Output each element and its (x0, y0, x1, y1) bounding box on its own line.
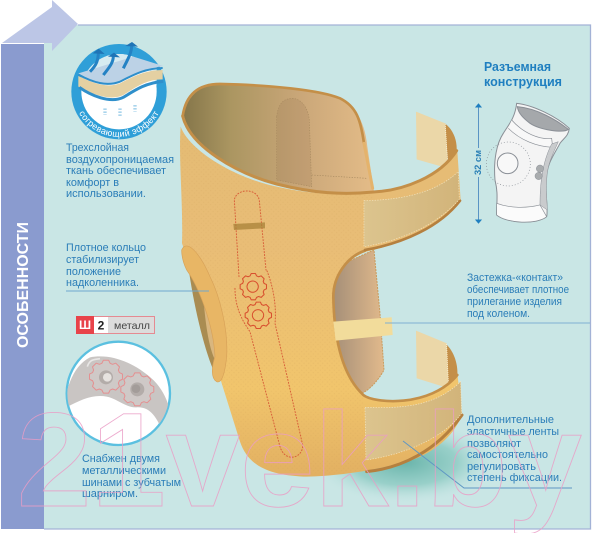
text: elastic straps: регулировать (467, 461, 536, 473)
splint buckle (233, 222, 265, 230)
text: elastic straps: эластичные ленты (467, 426, 559, 438)
badge: Ш 2 metal: Ш (79, 318, 91, 332)
text: metal splints: Снабжен двумя (82, 453, 160, 465)
callout line: patella (66, 290, 209, 292)
text: breathable fabric: воздухопроницаемая (66, 154, 174, 166)
text: contact closure (467, 272, 569, 320)
inset: hinge close-up (63, 342, 173, 445)
heading: split design: Разъемная (484, 60, 551, 74)
text: metal splints: металлическими (82, 465, 166, 477)
callout line: straps (403, 441, 572, 488)
text: patella ring: надколенника. (66, 277, 139, 289)
text: elastic straps: Дополнительные (467, 414, 554, 426)
closure band (333, 317, 393, 341)
sidebar arrow (1, 0, 78, 529)
text: contact closure: обеспечивает плотное (467, 284, 569, 296)
brace main body (180, 127, 462, 477)
knee brace illustration (180, 83, 462, 477)
text: metal splints: шинами с зубчатым (82, 477, 181, 489)
text: breathable fabric: ткань обеспечивает (66, 165, 167, 177)
text: elastic straps: степень фиксации. (467, 472, 562, 484)
badge: Ш 2 metal: металл (114, 320, 150, 332)
text: elastic straps: позволяют (467, 438, 522, 450)
brace rims (183, 84, 462, 472)
text: breathable fabric (66, 142, 174, 200)
callout line: closure (385, 322, 590, 324)
text: patella ring (66, 242, 146, 289)
lower strap back tab (416, 331, 457, 388)
text: elastic straps (467, 414, 562, 484)
size dimension arrow (473, 104, 484, 223)
text: elastic straps: самостоятельно (467, 449, 548, 461)
icon: warming fabric badge (71, 42, 167, 140)
text: patella ring: положение (66, 266, 121, 278)
text: contact closure: Застежка-«контакт» (467, 272, 563, 284)
badge: Ш 2 metal: 2 (98, 318, 105, 332)
inner stitched panel (277, 98, 367, 187)
velcro patch upper (364, 172, 459, 247)
text: breathable fabric: Трехслойная (66, 142, 129, 154)
heading: split design (484, 60, 562, 89)
heading: split design: конструкция (484, 75, 562, 89)
text: breathable fabric: использовании. (66, 188, 146, 200)
shadow under brace (310, 420, 500, 504)
splint stitching (234, 191, 303, 457)
splint gears (240, 273, 271, 328)
text: patella ring: стабилизирует (66, 254, 140, 266)
text: metal splints: шарниром. (82, 488, 138, 500)
size dimension arrow: 32 см (473, 150, 484, 175)
upper strap back tab (416, 112, 457, 168)
text: breathable fabric: комфорт в (66, 177, 119, 189)
sidebar heading: ОСОБЕННОСТИ (15, 222, 32, 348)
text: metal splints (82, 453, 181, 500)
text: contact closure: прилегание изделия (467, 296, 562, 308)
small knee brace drawing (486, 103, 569, 222)
text: contact closure: под коленом. (467, 308, 530, 320)
text: patella ring: Плотное кольцо (66, 242, 146, 254)
brace inner lining (183, 83, 374, 193)
rear panel seen through cut-out (333, 250, 384, 393)
watermark: 21vek.by (17, 386, 582, 533)
badge: Ш 2 metal (76, 316, 154, 334)
icon: warming fabric badge: согревающий эффект (80, 110, 158, 139)
kneecap ring (182, 246, 227, 382)
velcro patch lower (365, 382, 462, 460)
